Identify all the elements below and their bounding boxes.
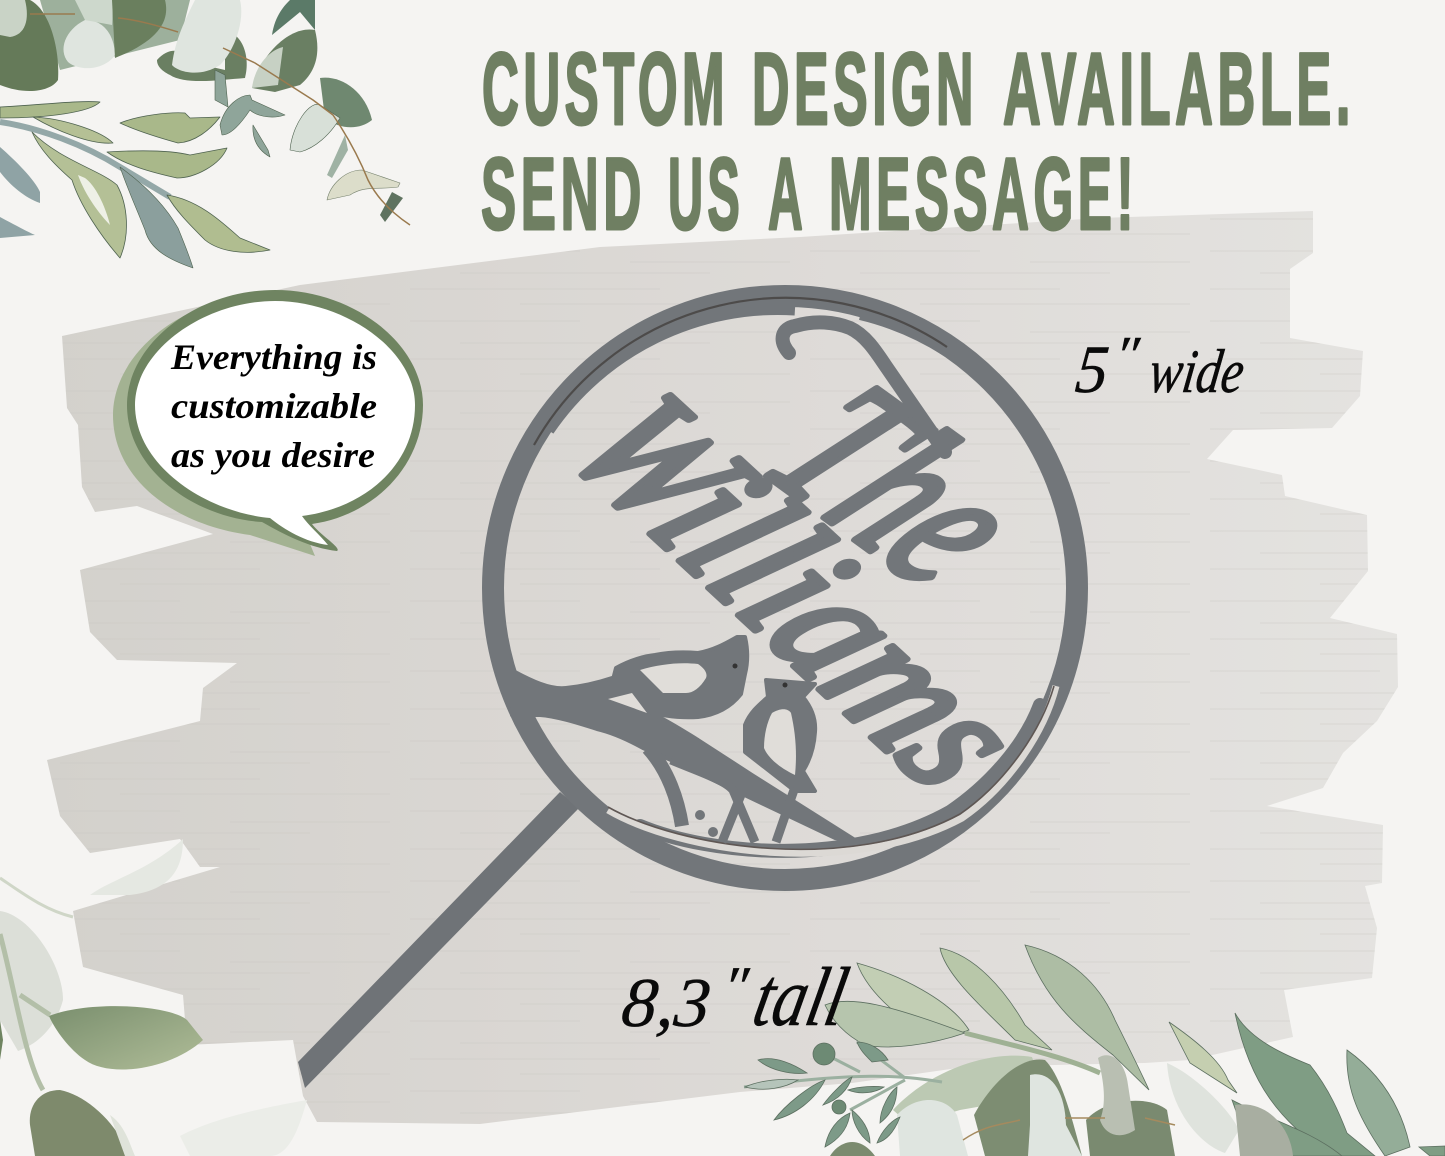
icon: left bird: [608, 637, 747, 717]
heading: MESSAGE!: [829, 137, 1138, 251]
dimension label: tall: ": [718, 956, 752, 1018]
painted wood brush stroke background: [47, 211, 1398, 1124]
dimension label: wide: wide: [1145, 337, 1249, 406]
bubble text: as you desire: [171, 435, 375, 475]
topper stick: [298, 792, 579, 1088]
topper T crossbar: [783, 322, 945, 452]
heading: A: [768, 137, 807, 251]
heading: SEND: [481, 137, 646, 251]
foliage: bottom left: [0, 839, 307, 1156]
bubble body: [135, 301, 415, 545]
heading: CUSTOM: [482, 32, 729, 146]
bubble text: [170, 337, 377, 475]
topper branch and birds: [512, 637, 858, 842]
dimension label: wide: ": [1110, 326, 1144, 384]
heading: DESIGN: [752, 32, 978, 146]
dimension label: wide: 5: [1072, 331, 1112, 407]
heading: [481, 32, 1355, 251]
bubble text: customizable: [171, 386, 377, 426]
dimension label: wide: [1072, 326, 1249, 407]
foliage: top left: [0, 0, 410, 268]
dimension label: tall: [618, 951, 856, 1044]
topper ring: [493, 296, 1077, 880]
bubble shadow: [113, 296, 315, 556]
dimension label: tall: 8,3: [618, 964, 714, 1042]
cake topper: [298, 296, 1077, 1088]
dimension label: tall: tall: [746, 951, 856, 1044]
icon: right bird: [745, 680, 815, 791]
topper lettering: The Williams: The: [721, 350, 1073, 621]
bubble text: Everything is: [170, 337, 377, 377]
heading: US: [668, 137, 744, 251]
foliage: bottom right: [744, 945, 1445, 1156]
icon: berry sprig: [744, 1042, 942, 1147]
bubble outline: [127, 290, 423, 551]
speech bubble: [113, 290, 423, 556]
topper lettering: The Williams: Williams: [529, 365, 1070, 815]
